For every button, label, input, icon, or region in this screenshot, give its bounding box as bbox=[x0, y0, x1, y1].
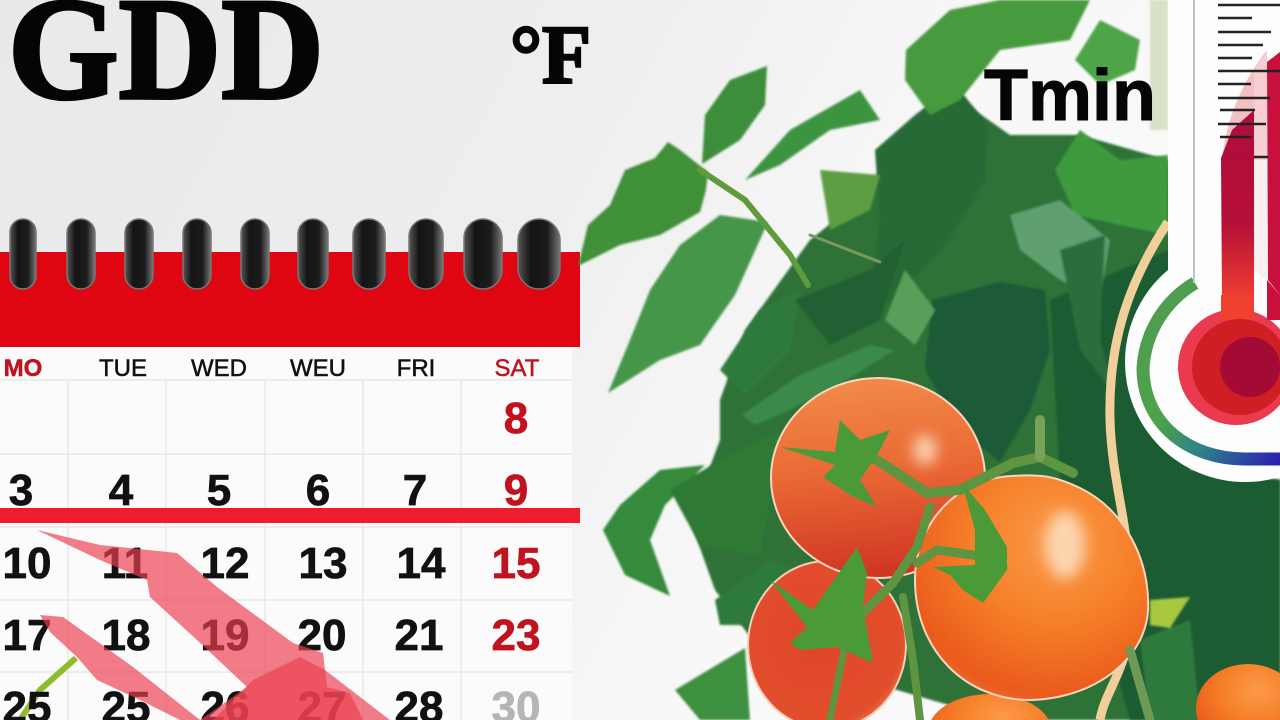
tomato: bottom centre bbox=[928, 694, 1052, 720]
weekday labels bbox=[4, 355, 540, 382]
weekday labels: TUE bbox=[99, 355, 147, 382]
date numbers: 20 bbox=[298, 611, 346, 660]
weekday labels: SAT bbox=[495, 355, 540, 382]
red brush strokes bbox=[37, 530, 390, 720]
tomato vine and calyx bbox=[813, 420, 1150, 720]
thermometer bbox=[1125, 0, 1280, 482]
date numbers: 8 bbox=[504, 394, 528, 443]
date numbers: 12 bbox=[201, 539, 249, 588]
tomato: upper bbox=[771, 378, 985, 578]
weekday labels: WED bbox=[191, 355, 247, 382]
date numbers: 21 bbox=[395, 611, 443, 660]
stems bbox=[700, 170, 880, 285]
vine twine bbox=[1100, 222, 1168, 720]
date numbers: 6 bbox=[306, 466, 330, 515]
date numbers: 15 bbox=[492, 539, 540, 588]
date numbers: 23 bbox=[492, 611, 540, 660]
date numbers: 11 bbox=[102, 539, 148, 588]
date numbers: 19 bbox=[201, 611, 249, 660]
weekday labels: WEU bbox=[290, 355, 346, 382]
tomato: right edge bbox=[1196, 664, 1280, 720]
date numbers: 10 bbox=[3, 539, 51, 588]
weekday labels: FRI bbox=[397, 355, 435, 382]
date numbers: 4 bbox=[109, 466, 134, 515]
calendar header band bbox=[0, 252, 580, 347]
highlights bbox=[1045, 511, 1085, 579]
red calendar stripe bbox=[0, 508, 580, 523]
foliage mass bbox=[690, 100, 1280, 720]
date numbers bbox=[3, 394, 540, 720]
tomato: large front bbox=[915, 475, 1148, 700]
weekday labels: MO bbox=[4, 355, 42, 382]
bulb bbox=[1178, 309, 1280, 425]
mercury tube bbox=[1222, 50, 1267, 160]
date numbers: 5 bbox=[207, 466, 231, 515]
green stem on calendar bbox=[20, 658, 76, 720]
calendar bbox=[0, 219, 580, 720]
leaves bbox=[578, 0, 1200, 720]
date numbers: 17 bbox=[3, 611, 51, 660]
tomato plant bbox=[578, 0, 1280, 720]
date numbers: 13 bbox=[299, 539, 347, 588]
tomato: lower left bbox=[748, 561, 906, 720]
label: degrees Fahrenheit: °F bbox=[510, 9, 591, 102]
date numbers: 18 bbox=[102, 611, 150, 660]
scale ticks bbox=[1218, 5, 1280, 157]
date numbers: 3 bbox=[9, 466, 33, 515]
label: Tmin: Tmin bbox=[984, 56, 1156, 136]
thermometer body bbox=[1125, 0, 1280, 482]
date numbers: 9 bbox=[504, 466, 528, 515]
calendar page bbox=[0, 347, 572, 720]
date numbers: 7 bbox=[403, 466, 427, 515]
date numbers: 14 bbox=[397, 539, 446, 588]
colored ring bbox=[1143, 283, 1280, 459]
spiral rings bbox=[10, 219, 560, 289]
